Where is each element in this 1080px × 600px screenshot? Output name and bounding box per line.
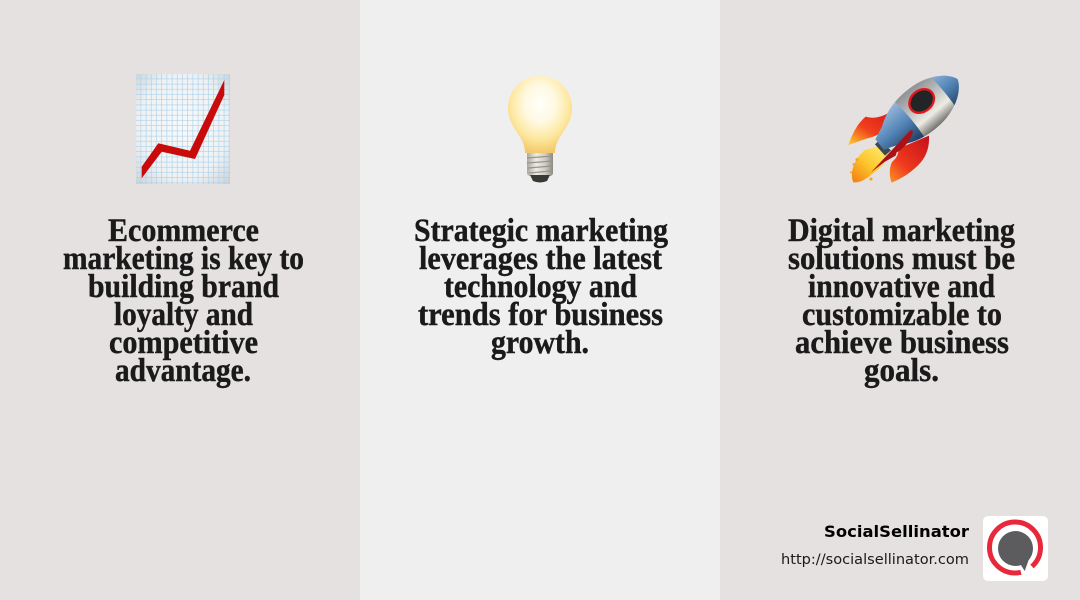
heading: strategic marketing: leverages the latest: [419, 241, 662, 277]
heading: digital marketing: achieve business: [795, 325, 1009, 361]
icon part: flame sparks: [850, 158, 872, 180]
heading: digital marketing: customizable to: [802, 297, 1002, 333]
heading: ecommerce marketing: [63, 213, 304, 389]
icon part: window: [905, 84, 939, 118]
icon: rocket: [848, 76, 959, 183]
heading: digital marketing: innovative and: [808, 269, 995, 305]
heading: strategic marketing: trends for business: [418, 297, 663, 333]
icon part: flame: [852, 147, 890, 182]
panel: left background: [0, 0, 360, 600]
icon part: nozzle: [875, 140, 891, 156]
heading: strategic marketing: technology and: [444, 269, 637, 305]
heading: strategic marketing: Strategic marketing: [414, 213, 668, 249]
heading: digital marketing: goals.: [864, 353, 939, 389]
heading: digital marketing: Digital marketing: [788, 213, 1015, 249]
heading: digital marketing: [788, 213, 1015, 389]
website url: http://socialsellinator.com: [781, 552, 969, 568]
panel: middle background: [360, 0, 720, 600]
heading: digital marketing: solutions must be: [788, 241, 1015, 277]
heading: ecommerce marketing: marketing is key to: [63, 241, 304, 277]
heading: ecommerce marketing: advantage.: [115, 353, 251, 389]
logo: [983, 516, 1048, 581]
heading: strategic marketing: [414, 213, 668, 361]
brand name: SocialSellinator: [824, 522, 969, 541]
icon part: left fin: [848, 108, 896, 145]
icon part: right fin: [890, 136, 929, 183]
panel: right background: [720, 0, 1080, 600]
heading: ecommerce marketing: Ecommerce: [108, 213, 259, 249]
icon: chart with upward trend: [136, 74, 230, 184]
icon: light bulb: [508, 76, 572, 182]
heading: strategic marketing: growth.: [491, 325, 589, 361]
heading: ecommerce marketing: competitive: [109, 325, 258, 361]
icon part: centre fin: [871, 130, 913, 172]
heading: ecommerce marketing: building brand: [88, 269, 279, 305]
heading: ecommerce marketing: loyalty and: [114, 297, 253, 333]
icon part: rocket body: [876, 76, 959, 150]
